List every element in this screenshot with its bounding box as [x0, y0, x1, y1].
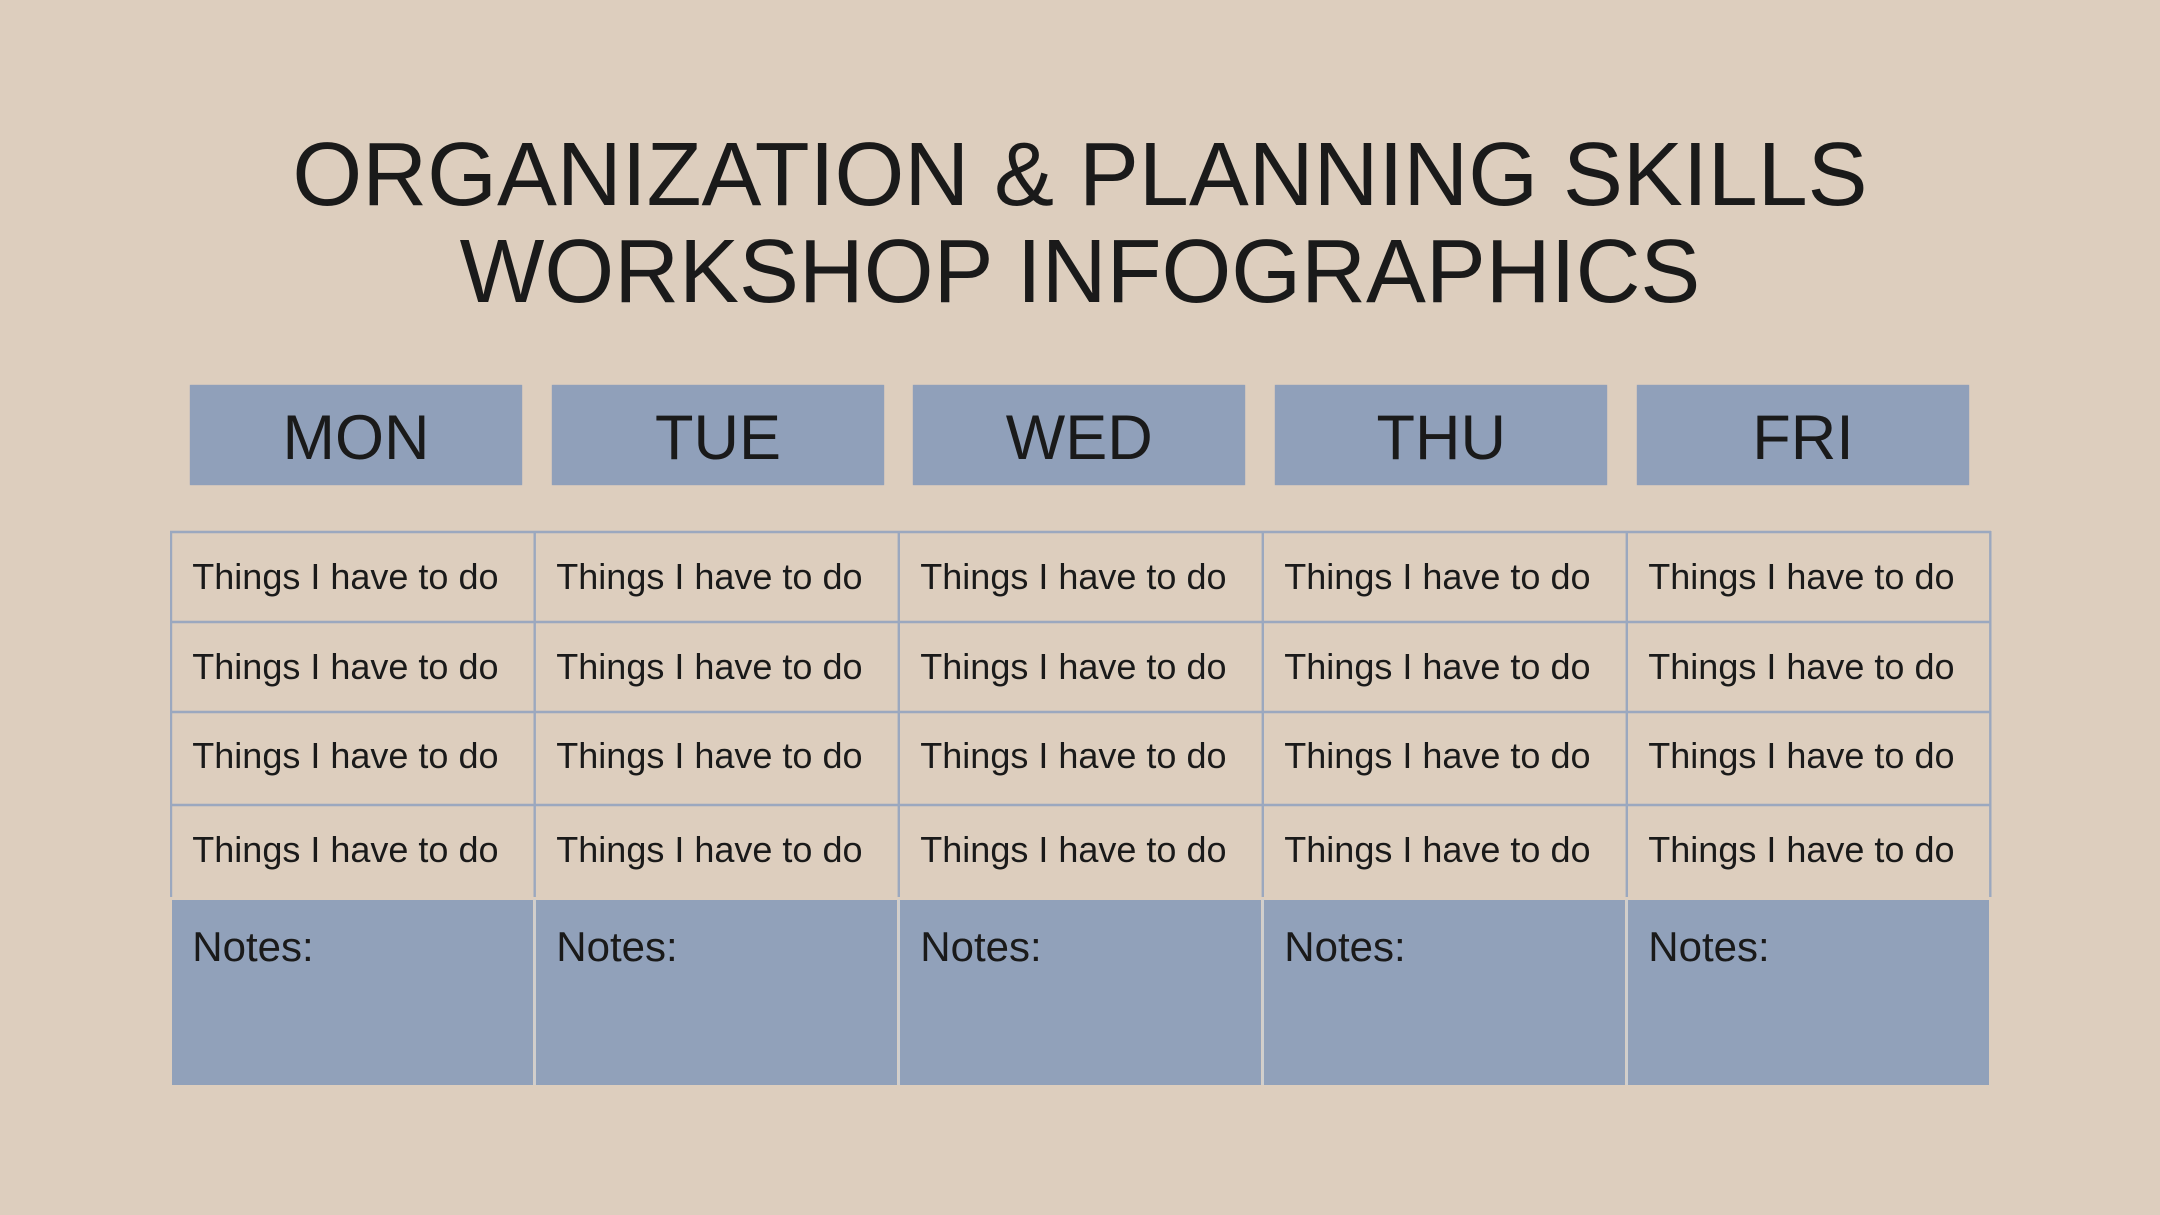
header: Monday — [190, 384, 522, 485]
task 4: Things I have to do — [1648, 829, 1954, 870]
planner table — [170, 530, 1992, 1085]
notes box — [1628, 900, 1989, 1085]
task 1: Things I have to do — [1648, 556, 1954, 597]
notes box: Notes: — [1284, 923, 1406, 970]
task 3: Things I have to do — [1648, 735, 1954, 776]
title — [292, 125, 1868, 322]
notes box — [172, 900, 533, 1085]
header: Friday: FRI — [1752, 402, 1854, 472]
notes box: Notes: — [192, 923, 314, 970]
header: Wednesday: WED — [1006, 402, 1153, 472]
task 3: Things I have to do — [1284, 735, 1590, 776]
header: Friday — [1637, 384, 1969, 485]
title line 2: WORKSHOP INFOGRAPHICS — [460, 222, 1700, 322]
column: Friday tasks and notes — [1628, 556, 1989, 1085]
task 1: Things I have to do — [920, 556, 1226, 597]
table grid lines — [170, 530, 1992, 1085]
notes box: Notes: — [556, 923, 678, 970]
header: Tuesday: TUE — [655, 402, 781, 472]
task 1: Things I have to do — [556, 556, 862, 597]
task 3: Things I have to do — [920, 735, 1226, 776]
task 4: Things I have to do — [1284, 829, 1590, 870]
task 1: Things I have to do — [192, 556, 498, 597]
task 1: Things I have to do — [1284, 556, 1590, 597]
notes box — [900, 900, 1261, 1085]
notes box: Notes: — [920, 923, 1042, 970]
title line 1: ORGANIZATION & PLANNING SKILLS — [292, 125, 1868, 225]
column: Thursday tasks and notes — [1264, 556, 1625, 1085]
task 2: Things I have to do — [1284, 646, 1590, 687]
column: Tuesday tasks and notes — [536, 556, 897, 1085]
day header row — [190, 384, 1970, 486]
header: Wednesday — [913, 384, 1245, 485]
task 4: Things I have to do — [192, 829, 498, 870]
task 2: Things I have to do — [192, 646, 498, 687]
task 2: Things I have to do — [920, 646, 1226, 687]
task 4: Things I have to do — [920, 829, 1226, 870]
header: Thursday — [1275, 384, 1607, 485]
notes box — [1264, 900, 1625, 1085]
task 4: Things I have to do — [556, 829, 862, 870]
notes box — [536, 900, 897, 1085]
column: Monday tasks and notes — [172, 556, 533, 1085]
notes box: Notes: — [1648, 923, 1770, 970]
header: Tuesday — [552, 384, 884, 485]
header: Monday: MON — [282, 402, 429, 472]
column: Wednesday tasks and notes — [900, 556, 1261, 1085]
header: Thursday: THU — [1377, 402, 1506, 472]
task 3: Things I have to do — [192, 735, 498, 776]
task 2: Things I have to do — [1648, 646, 1954, 687]
task 3: Things I have to do — [556, 735, 862, 776]
task 2: Things I have to do — [556, 646, 862, 687]
